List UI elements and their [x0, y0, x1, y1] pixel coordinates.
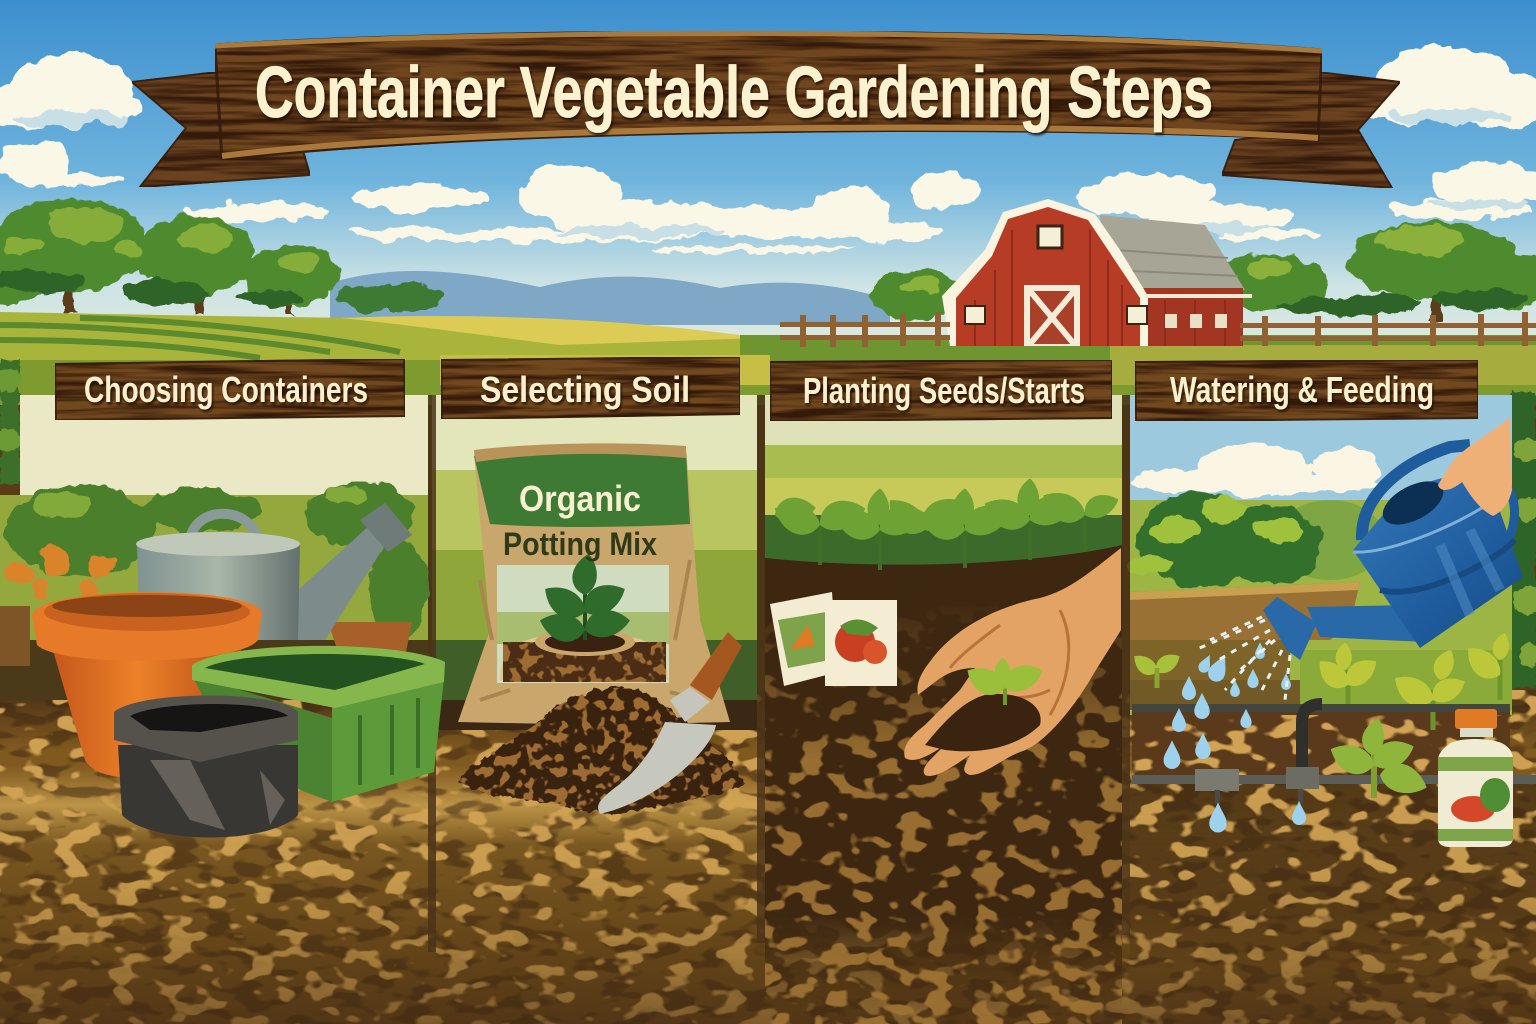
red barn: [942, 199, 1252, 346]
soil ground: [0, 690, 1536, 1024]
water droplets: [1164, 642, 1306, 832]
panel 4 garden backdrop: [1128, 494, 1512, 715]
heading: selecting soil: [441, 357, 740, 419]
large seedling: [1325, 717, 1431, 799]
seedling row: [769, 478, 1122, 570]
banner bottom trim: [222, 128, 1318, 156]
wooden dividers: [428, 395, 1130, 952]
icon: blue watering can: [1263, 445, 1523, 660]
icon: green planter: [192, 646, 445, 802]
icon: hand on can: [1438, 417, 1512, 516]
bag label text: [503, 478, 657, 562]
dark soil bed: [765, 545, 1122, 1024]
heading: choosing containers: Choosing Containers: [84, 369, 368, 410]
left tree line: [0, 199, 445, 315]
bag label text: Potting Mix: [503, 526, 657, 562]
panel 2 backdrop: [432, 395, 757, 730]
heading: planting seeds/starts: [770, 360, 1112, 421]
panel: selecting soil: [432, 395, 757, 820]
distant hills: [330, 271, 890, 325]
heading: watering & feeding: [1135, 360, 1478, 421]
banner main board: [215, 32, 1322, 160]
clouds: [0, 46, 1536, 254]
right tree line: [870, 222, 1536, 321]
water spray streaks: [1195, 617, 1290, 700]
heading: planting seeds/starts: Planting Seeds/Starts: [803, 370, 1085, 411]
panel 3 backdrop: [765, 395, 1122, 565]
heading: watering & feeding: Watering & Feeding: [1170, 369, 1434, 410]
panel 4 soil blotches: [1132, 715, 1510, 775]
bag label text: Organic: [519, 478, 641, 519]
side vines: [0, 360, 1536, 687]
panel: watering & feeding: [1128, 395, 1536, 847]
panel 1 backdrop: [0, 395, 428, 700]
icon: potting mix bag: [458, 443, 730, 725]
banner left tail: [132, 72, 310, 187]
icon: seed packets: [770, 592, 897, 686]
icon: hand holding seedling: [904, 548, 1121, 776]
soil below drip line: [1132, 712, 1510, 782]
panel: choosing containers: [0, 395, 445, 838]
icon: black fabric pot: [114, 696, 298, 838]
panel 4 sky and clouds: [1130, 395, 1512, 505]
wooden fences: [780, 312, 1536, 347]
banner right tail: [1222, 72, 1400, 188]
icon: galvanized watering can: [136, 503, 412, 640]
title banner: [132, 32, 1400, 188]
heading: choosing containers: [55, 359, 405, 420]
drip irrigation pipes: [1132, 704, 1536, 804]
young plants: [1129, 631, 1511, 730]
heading: selecting soil: Selecting Soil: [480, 369, 690, 410]
title: Container Vegetable Gardening Steps: [255, 53, 1213, 133]
icon: terracotta pot: [32, 592, 262, 778]
icon: fertilizer bottle: [1438, 709, 1513, 847]
icon: hand trowel: [598, 632, 742, 814]
farm fields: [0, 312, 1536, 405]
panel: planting seeds/starts: [765, 395, 1122, 1024]
soil pile: [458, 686, 745, 815]
banner top trim: [215, 33, 1322, 51]
sky background: [0, 0, 1536, 360]
